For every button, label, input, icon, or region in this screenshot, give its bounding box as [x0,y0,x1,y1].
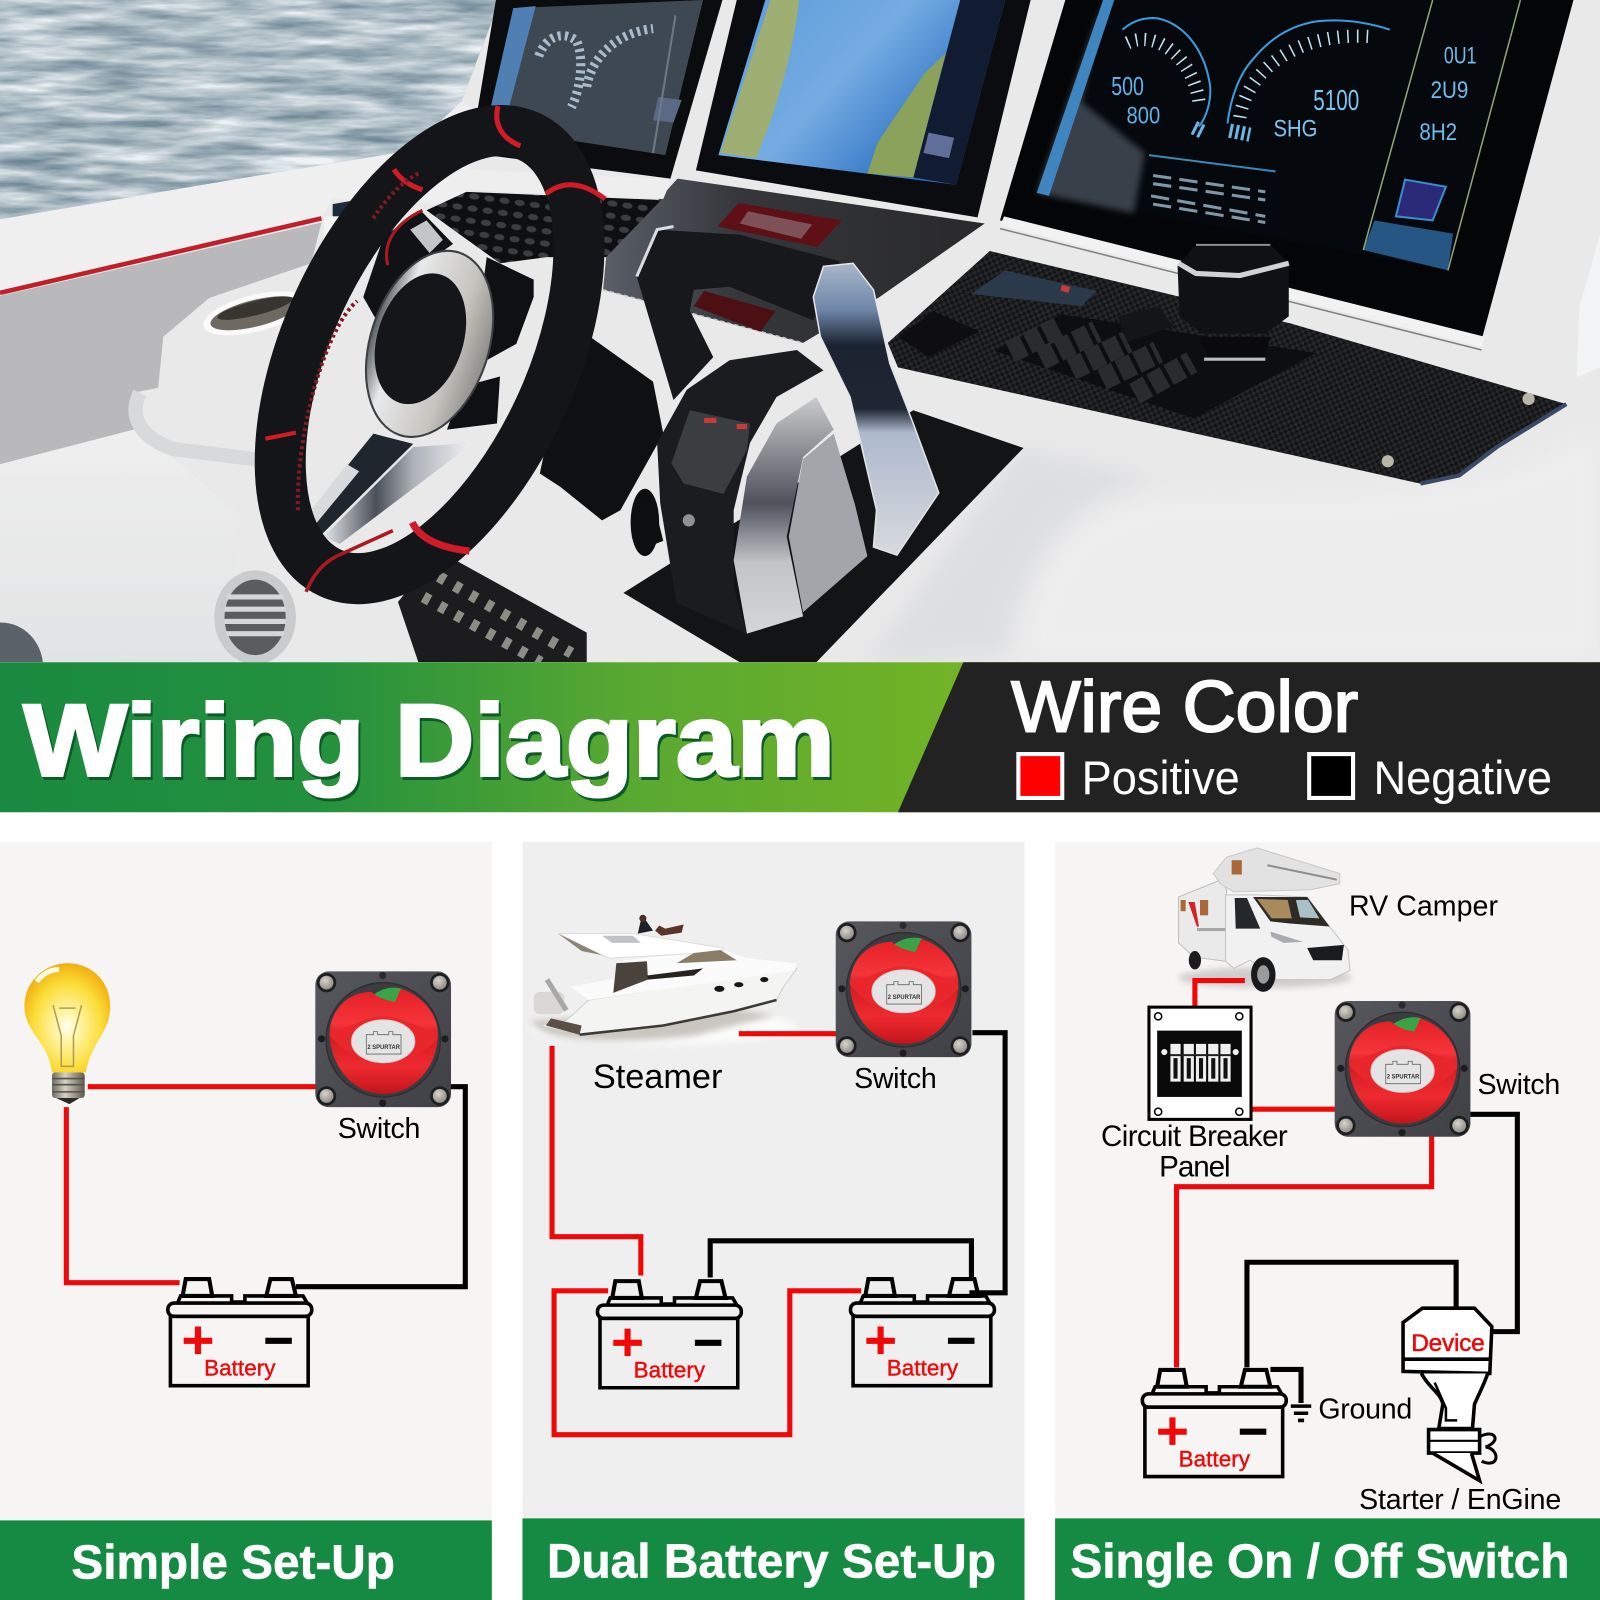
icon: circuit breaker panel [1149,1007,1251,1119]
right display with gauges: 500 [1111,73,1144,101]
label: steamer: Steamer [593,1058,722,1096]
panel: dual battery set-up [522,842,1024,1518]
right display with gauges: 5100 [1313,85,1359,117]
icon: battery two: Battery [887,1356,959,1381]
panel: simple set-up [0,842,492,1520]
wires: positive red [1177,981,1432,1367]
label: starter engine: Starter / EnGine [1359,1484,1561,1516]
caption bar: dual battery set-up: Dual Battery Set-Up [547,1536,996,1589]
icon: battery [1142,1370,1286,1477]
caption bar: single on/off switch: Single On / Off Switch [1070,1536,1569,1589]
label: RV camper: RV Camper [1349,890,1498,922]
title: Wiring Diagram: Wiring Diagram [26,687,837,801]
wires: negative black [1247,1114,1517,1403]
icon: light bulb [24,963,110,1104]
icon: battery switch [1335,1001,1470,1137]
icon: battery [168,1279,312,1386]
right display with gauges: 2U9 [1431,77,1468,104]
white trim right edge [1577,235,1600,378]
banner: green title bar [0,662,1600,812]
rail and keypad behind wheel [324,190,668,264]
wires: negative black [296,1087,465,1287]
photo: boat helm dashboard [0,0,1600,664]
legend heading: Wire Color: Wire Color [1011,667,1358,748]
icon: battery switch [836,921,971,1057]
centre carbon panel [603,179,985,343]
label: circuit breaker panel: Circuit Breaker [1101,1120,1288,1153]
legend: negative swatch: Negative [1373,752,1552,804]
icon: yacht steamer [531,915,797,1045]
legend: positive swatch [1018,752,1240,804]
title: Wiring Diagram: Wiring Diagram [23,684,835,798]
right display with gauges: 0U1 [1444,42,1477,69]
caption bar: simple set-up: Simple Set-Up [71,1537,395,1590]
middle display with chart map [696,0,1031,217]
right display with gauges: 800 [1127,102,1160,129]
label: switch: Switch [1478,1069,1560,1101]
steering column [540,323,663,556]
icon: battery: Battery [1179,1446,1251,1471]
label: circuit breaker panel: Panel [1159,1151,1231,1184]
throttle control [623,227,1023,662]
hull gunwale and grey side panel [0,102,462,466]
legend: positive swatch: Positive [1082,752,1240,804]
right display with gauges [1000,0,1573,350]
caption bar: dual battery set-up [522,1518,1024,1600]
left display [470,0,722,179]
icon: battery one: Battery [634,1358,706,1383]
right display with gauges: 8H2 [1419,119,1457,146]
caption bar: simple set-up [0,1520,492,1600]
icon: ground symbol [1291,1406,1311,1420]
icon: battery switch [315,971,451,1107]
banner: wire color dark section [898,662,1600,812]
icon: outboard engine device: Device [1411,1330,1485,1357]
wires: positive red [552,1034,861,1435]
icon: RV camper [1179,848,1352,992]
right carbon panel with switches [888,245,1566,484]
wires: negative black [710,1033,1005,1293]
console shading [886,457,1119,655]
icon: battery switch: 2 SPURTAR [367,1044,400,1051]
water through window [0,0,510,224]
icon: battery switch: 2 SPURTAR [1387,1074,1420,1081]
label: switch: Switch [338,1113,420,1145]
dark button strip and vent [0,562,587,662]
label: ground: Ground [1318,1393,1412,1425]
icon: battery two [851,1279,994,1386]
label: switch: Switch [854,1063,937,1095]
icon: battery one [597,1281,741,1388]
icon: outboard engine device [1403,1308,1496,1481]
icon: battery switch: 2 SPURTAR [888,994,921,1001]
caption bar: single on/off switch [1055,1518,1600,1600]
icon: battery: Battery [204,1356,276,1381]
wires: positive red [66,1087,316,1283]
steering wheel [254,105,607,604]
right display with gauges: SHG [1273,116,1317,143]
panel: single on/off switch [1055,842,1600,1518]
